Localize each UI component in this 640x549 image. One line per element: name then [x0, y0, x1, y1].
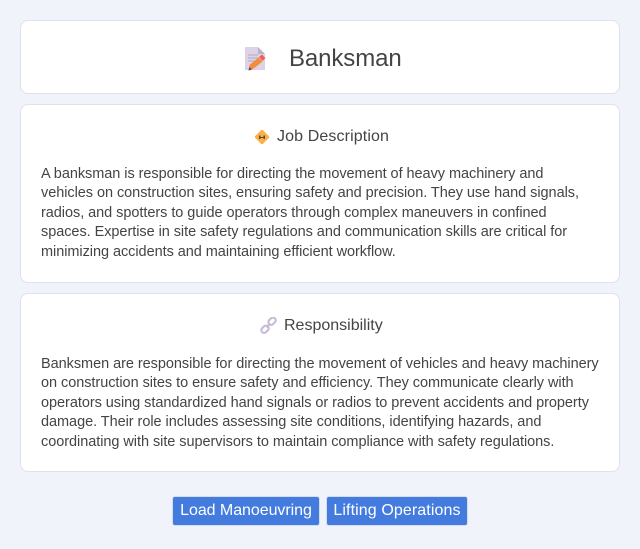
tag: load manoeuvring: [172, 496, 320, 526]
text block: job description: A banksman is responsible for directing the movement of heavy machinery and: [41, 166, 543, 182]
text block: responsibility: damage. Their role includes assessing site conditions, identifying hazards, and: [41, 414, 541, 430]
text block: job description: minimizing accidents and maintaining efficient workflow.: [41, 244, 396, 260]
text block: job description: radios, and spotters to guide operators through complex maneuvers in confined: [41, 205, 547, 221]
text block: responsibility: on construction sites to ensure safety and efficiency. They communicate clearly with: [41, 375, 574, 391]
heading: responsibility: Responsibility: [284, 317, 383, 334]
title: Banksman: [289, 45, 402, 72]
panel: responsibility: [20, 293, 620, 472]
text block: responsibility: [41, 356, 599, 450]
text block: job description: vehicles on construction sites, ensuring safety and precision. They use hand signals,: [41, 185, 579, 201]
text block: responsibility: coordinating with site supervisors to maintain compliance with safety regulations.: [41, 434, 554, 450]
panel: job description: [20, 104, 620, 283]
heading: job description: Job Description: [277, 128, 389, 145]
text block: job description: [41, 166, 579, 260]
icon: road sign: [254, 130, 270, 144]
icon: document with pencil: [245, 47, 266, 70]
tag: load manoeuvring: Load Manoeuvring: [180, 502, 312, 519]
text block: responsibility: operators using standardized hand signals or radios to prevent accidents and property: [41, 395, 589, 411]
icon: chain link: [260, 317, 277, 334]
tag: lifting operations: [326, 496, 468, 526]
text block: responsibility: Banksmen are responsible for directing the movement of vehicles and heavy machinery: [41, 356, 599, 372]
text block: job description: spaces. Expertise in site safety regulations and communication skills are critical for: [41, 224, 567, 240]
tag: lifting operations: Lifting Operations: [333, 502, 461, 519]
panel: title card: [20, 20, 620, 94]
